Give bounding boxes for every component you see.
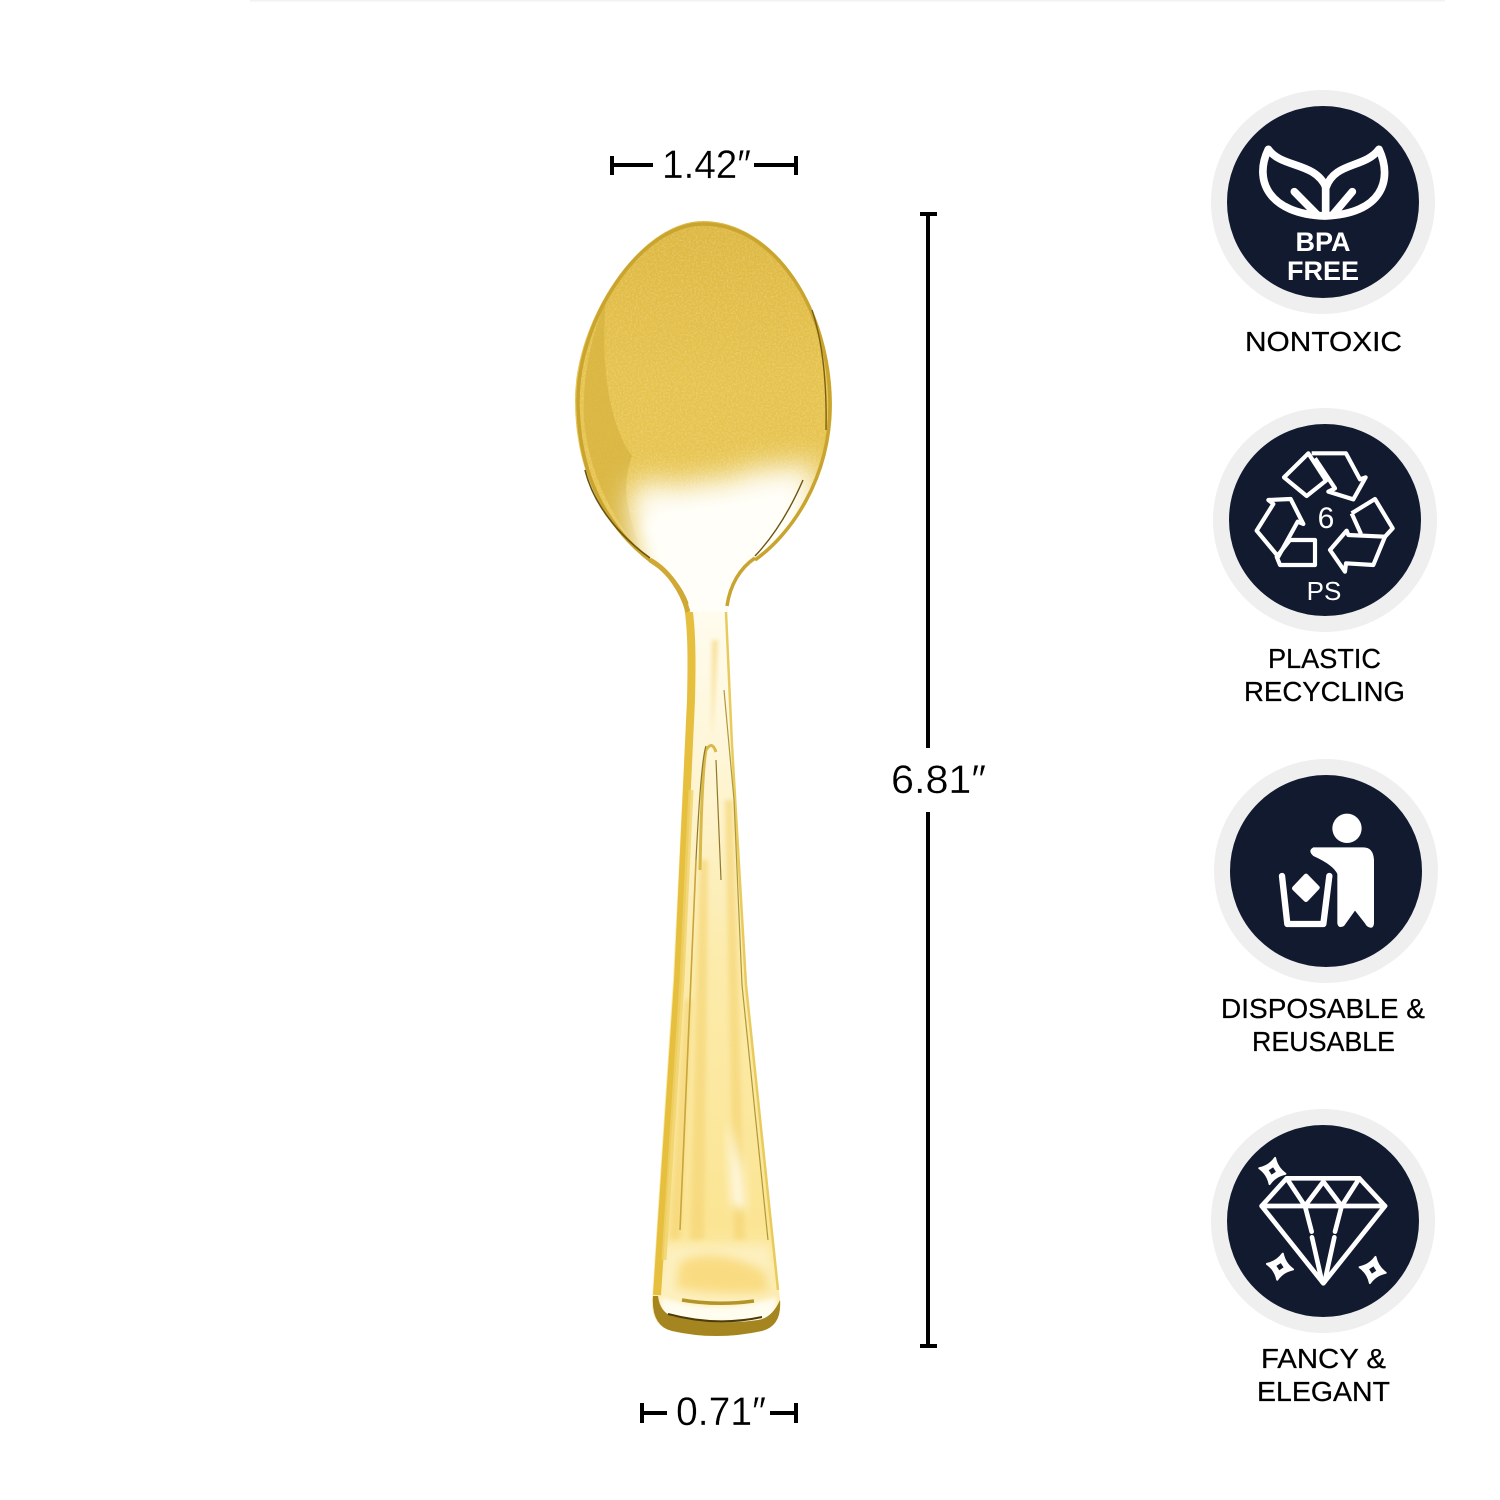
label: disposable and reusable: DISPOSABLE & <box>1221 993 1425 1024</box>
badge: disposable and reusable <box>1221 767 1430 1057</box>
badge: nontoxic: FREE <box>1287 256 1359 286</box>
top edge line <box>250 0 1445 2</box>
label: disposable and reusable <box>1221 993 1425 1057</box>
badge circle <box>1221 416 1429 624</box>
label: fancy and elegant: FANCY & <box>1261 1343 1386 1374</box>
handle inner arch groove <box>700 745 716 870</box>
icon: leaves <box>1263 149 1385 216</box>
dimension: bowl width 1.42 in: 1.42″ <box>662 143 751 187</box>
dimension: total length 6.81 in <box>891 212 986 1348</box>
badge: plastic recycling <box>1221 416 1429 707</box>
bowl rim <box>578 224 830 604</box>
badge circle <box>1219 1117 1427 1325</box>
handle tip rim <box>653 1296 780 1336</box>
label: fancy and elegant: ELEGANT <box>1257 1376 1390 1407</box>
handle tip pad <box>650 1245 780 1330</box>
label: plastic recycling: PLASTIC <box>1268 643 1381 674</box>
handle left edge stripe <box>657 600 692 1295</box>
handle right edge stripe <box>726 612 778 1290</box>
label: fancy and elegant <box>1257 1343 1390 1407</box>
bowl grain <box>570 215 840 515</box>
label: plastic recycling: RECYCLING <box>1244 676 1405 707</box>
badge: nontoxic <box>1219 98 1427 357</box>
label: nontoxic: NONTOXIC <box>1245 326 1402 357</box>
handle highlight <box>728 1120 746 1210</box>
icon text: resin code 6: 6 <box>1318 502 1334 535</box>
handle streaks <box>670 640 745 1240</box>
spoon bowl <box>570 215 840 620</box>
badge circle <box>1219 98 1427 306</box>
label: disposable and reusable: REUSABLE <box>1252 1026 1395 1057</box>
label: plastic recycling <box>1244 643 1405 707</box>
dimension: handle width 0.71 in <box>640 1390 798 1434</box>
icon text: PS: PS <box>1307 576 1341 606</box>
icon: diamond with sparkles <box>1257 1155 1388 1286</box>
icon text: BPA free: BPA <box>1295 227 1351 257</box>
bowl pale fade <box>630 462 815 620</box>
dimension: total length 6.81 in: 6.81″ <box>891 758 986 802</box>
badge circle <box>1222 767 1430 975</box>
badge: fancy and elegant <box>1219 1117 1427 1407</box>
bowl left shadow crescent <box>584 305 632 539</box>
icon: person using trash bin <box>1282 814 1374 928</box>
icon: recycling arrows <box>1257 453 1393 572</box>
dimension: handle width 0.71 in: 0.71″ <box>676 1390 766 1434</box>
dimension: bowl width 1.42 in <box>610 143 798 187</box>
spoon illustration <box>570 215 840 1340</box>
spoon handle <box>652 612 780 1336</box>
